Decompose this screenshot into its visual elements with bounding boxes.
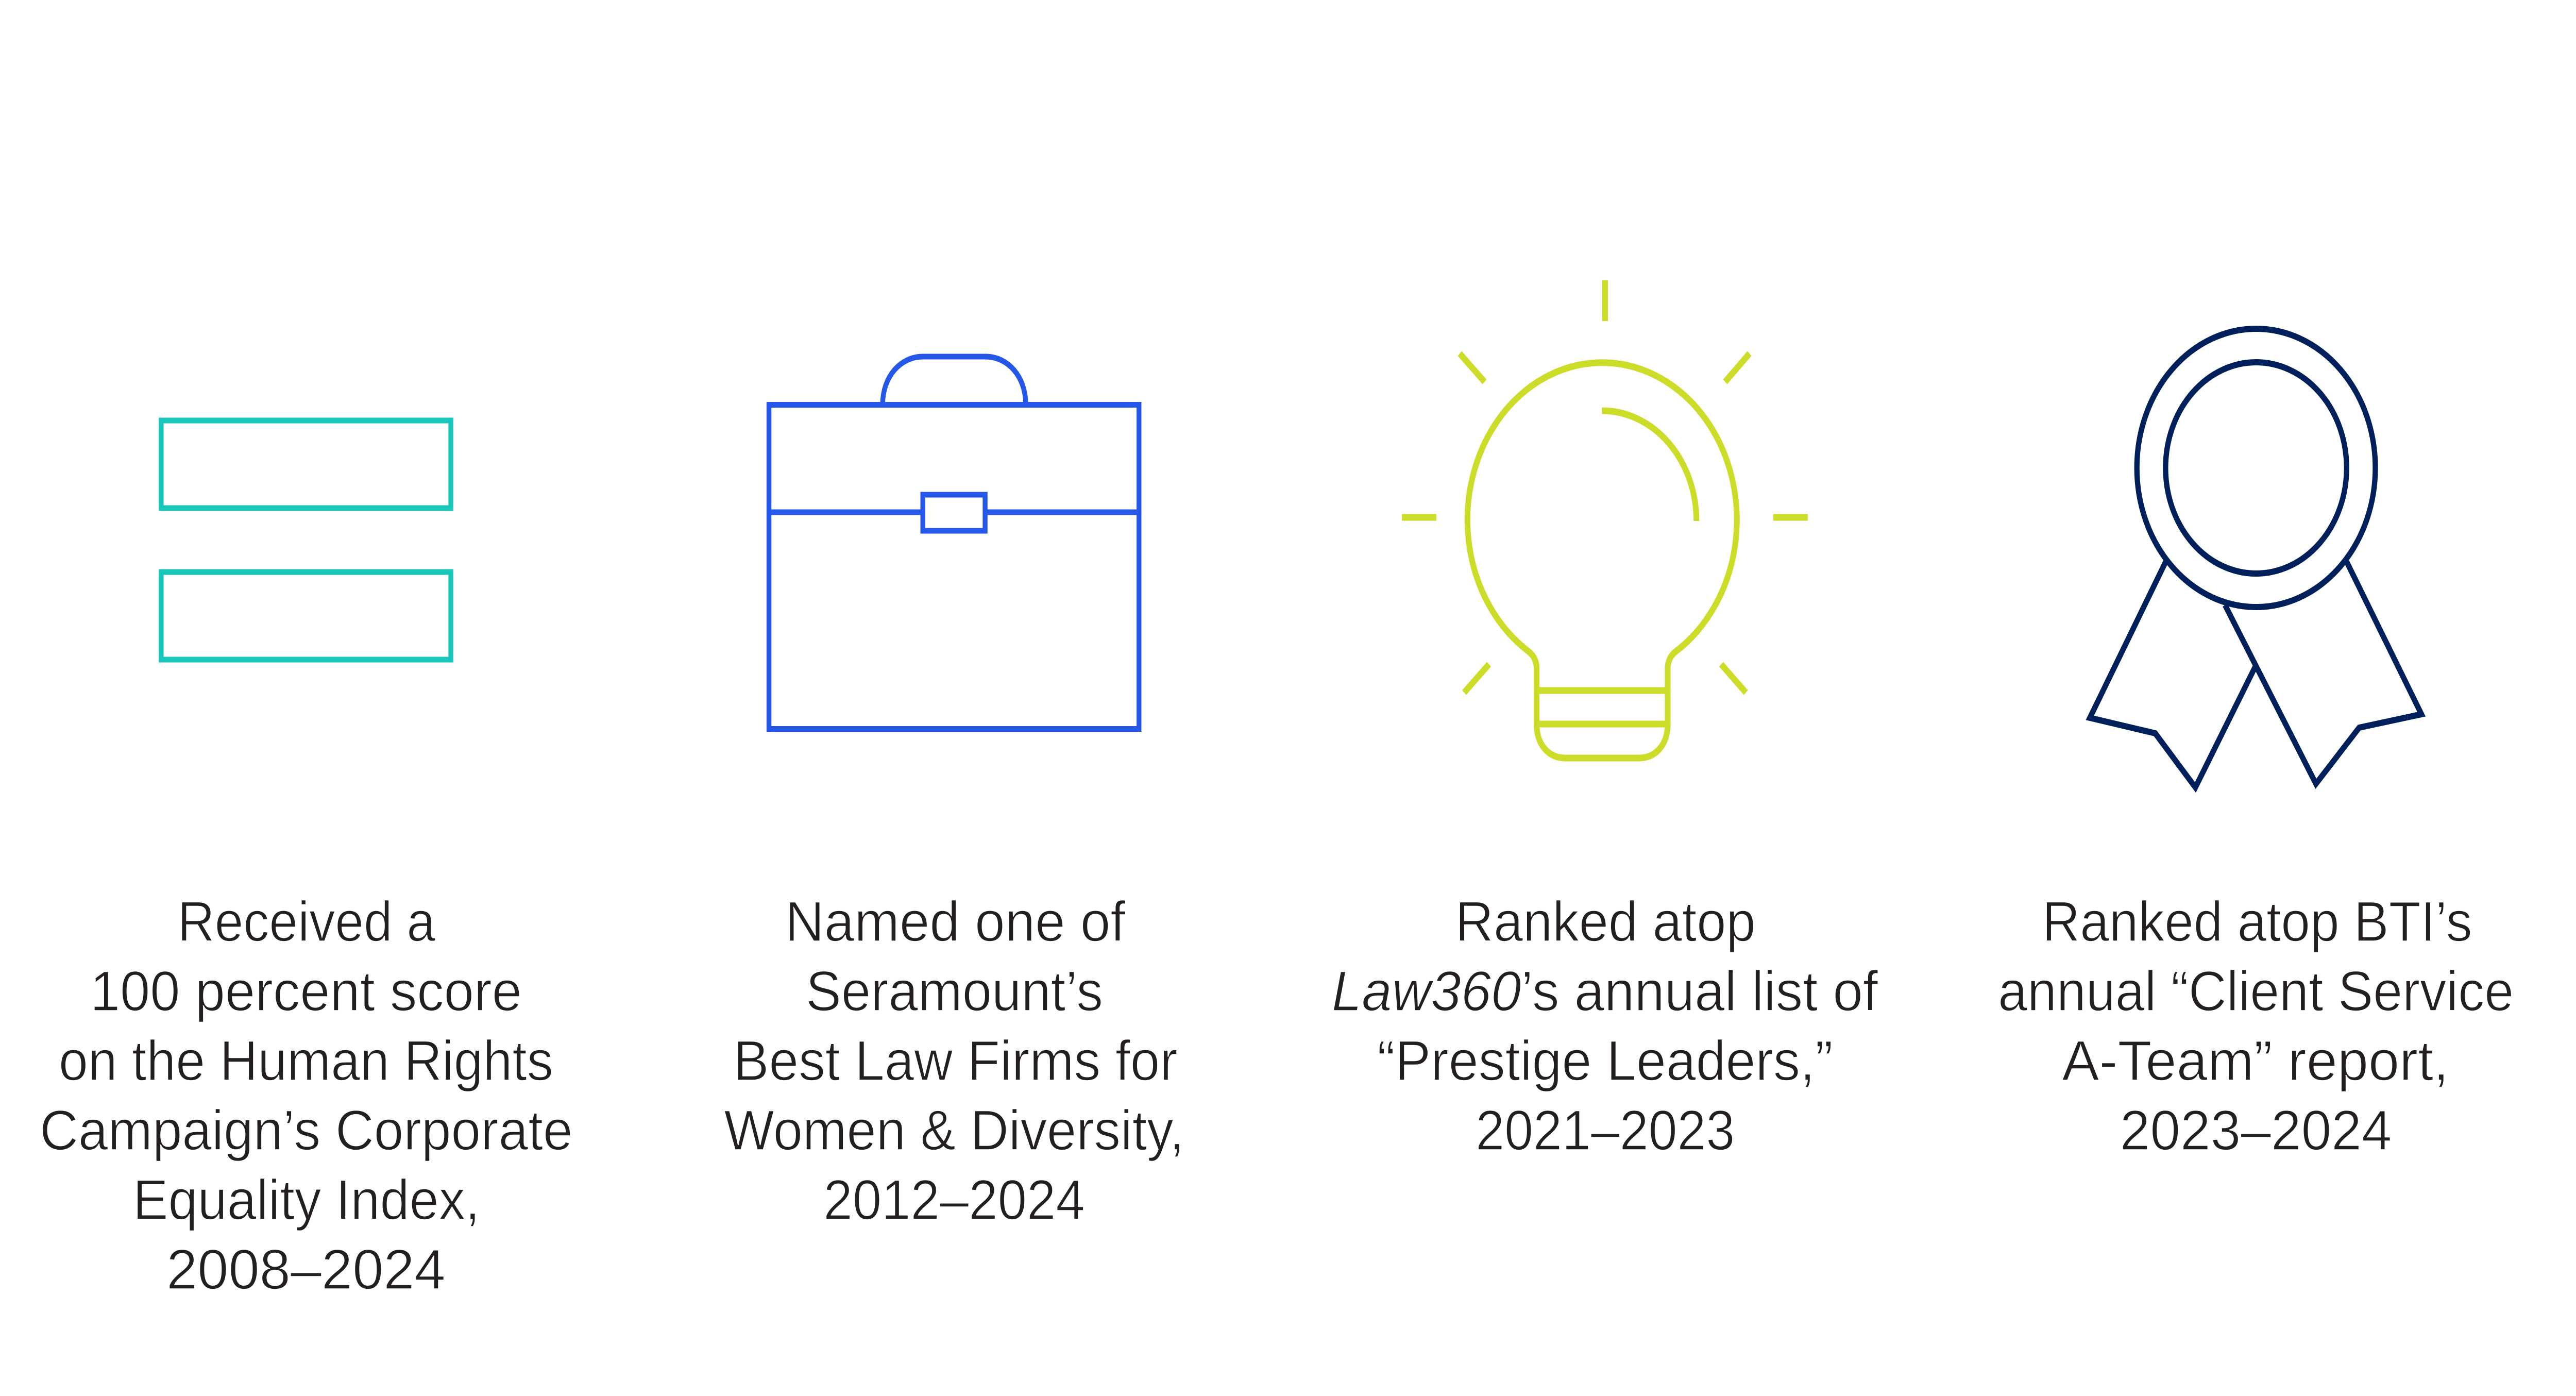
- icon: award ribbon: [2090, 329, 2421, 787]
- text: Best Law Firms for Women and Diversity: Best Law Firms for: [734, 1029, 1178, 1092]
- text: Prestige Leaders ranking: Ranked atop: [1455, 889, 1756, 953]
- panel: Law360 ranking: [1332, 280, 1878, 1162]
- text: Prestige Leaders ranking: Law360 ’s annual list of: [1332, 959, 1878, 1023]
- text: Prestige Leaders ranking: 2021–2023: [1476, 1098, 1735, 1162]
- text: Corporate Equality Index score: Received a: [178, 889, 435, 953]
- text: Best Law Firms for Women and Diversity: 2012–2024: [823, 1168, 1085, 1232]
- text: Best Law Firms for Women and Diversity: Named one of: [785, 889, 1126, 953]
- text: Corporate Equality Index score: Equality Index,: [133, 1168, 480, 1232]
- text: Prestige Leaders ranking: “Prestige Leaders,”: [1377, 1029, 1833, 1092]
- text: Prestige Leaders ranking: [1332, 889, 1878, 1162]
- text: Client Service A-Team ranking: 2023–2024: [2120, 1098, 2392, 1162]
- text: Corporate Equality Index score: on the Human Rights: [59, 1029, 553, 1092]
- text: Best Law Firms for Women and Diversity: Women & Diversity,: [724, 1098, 1184, 1162]
- text: Corporate Equality Index score: 2008–2024: [166, 1237, 446, 1301]
- icon: light bulb: [1402, 280, 1808, 758]
- text: Client Service A-Team ranking: Ranked atop BTI’s: [2042, 889, 2472, 953]
- panel: Human Rights Campaign award: [40, 421, 573, 1301]
- text: Best Law Firms for Women and Diversity: Seramount’s: [806, 959, 1103, 1023]
- text: Client Service A-Team ranking: [1998, 889, 2514, 1162]
- text: Client Service A-Team ranking: A-Team” report,: [2062, 1029, 2449, 1092]
- text: Best Law Firms for Women and Diversity: [724, 889, 1184, 1232]
- icon: briefcase: [769, 357, 1139, 729]
- text: Client Service A-Team ranking: annual “Client Service: [1998, 959, 2514, 1023]
- panel: BTI ranking: [1998, 329, 2514, 1162]
- panel: Seramount award: [724, 357, 1184, 1232]
- icon: equals sign: [161, 421, 451, 660]
- text: Corporate Equality Index score: [40, 889, 573, 1301]
- text: Corporate Equality Index score: 100 percent score: [90, 959, 522, 1023]
- text: Corporate Equality Index score: Campaign’s Corporate: [40, 1098, 573, 1162]
